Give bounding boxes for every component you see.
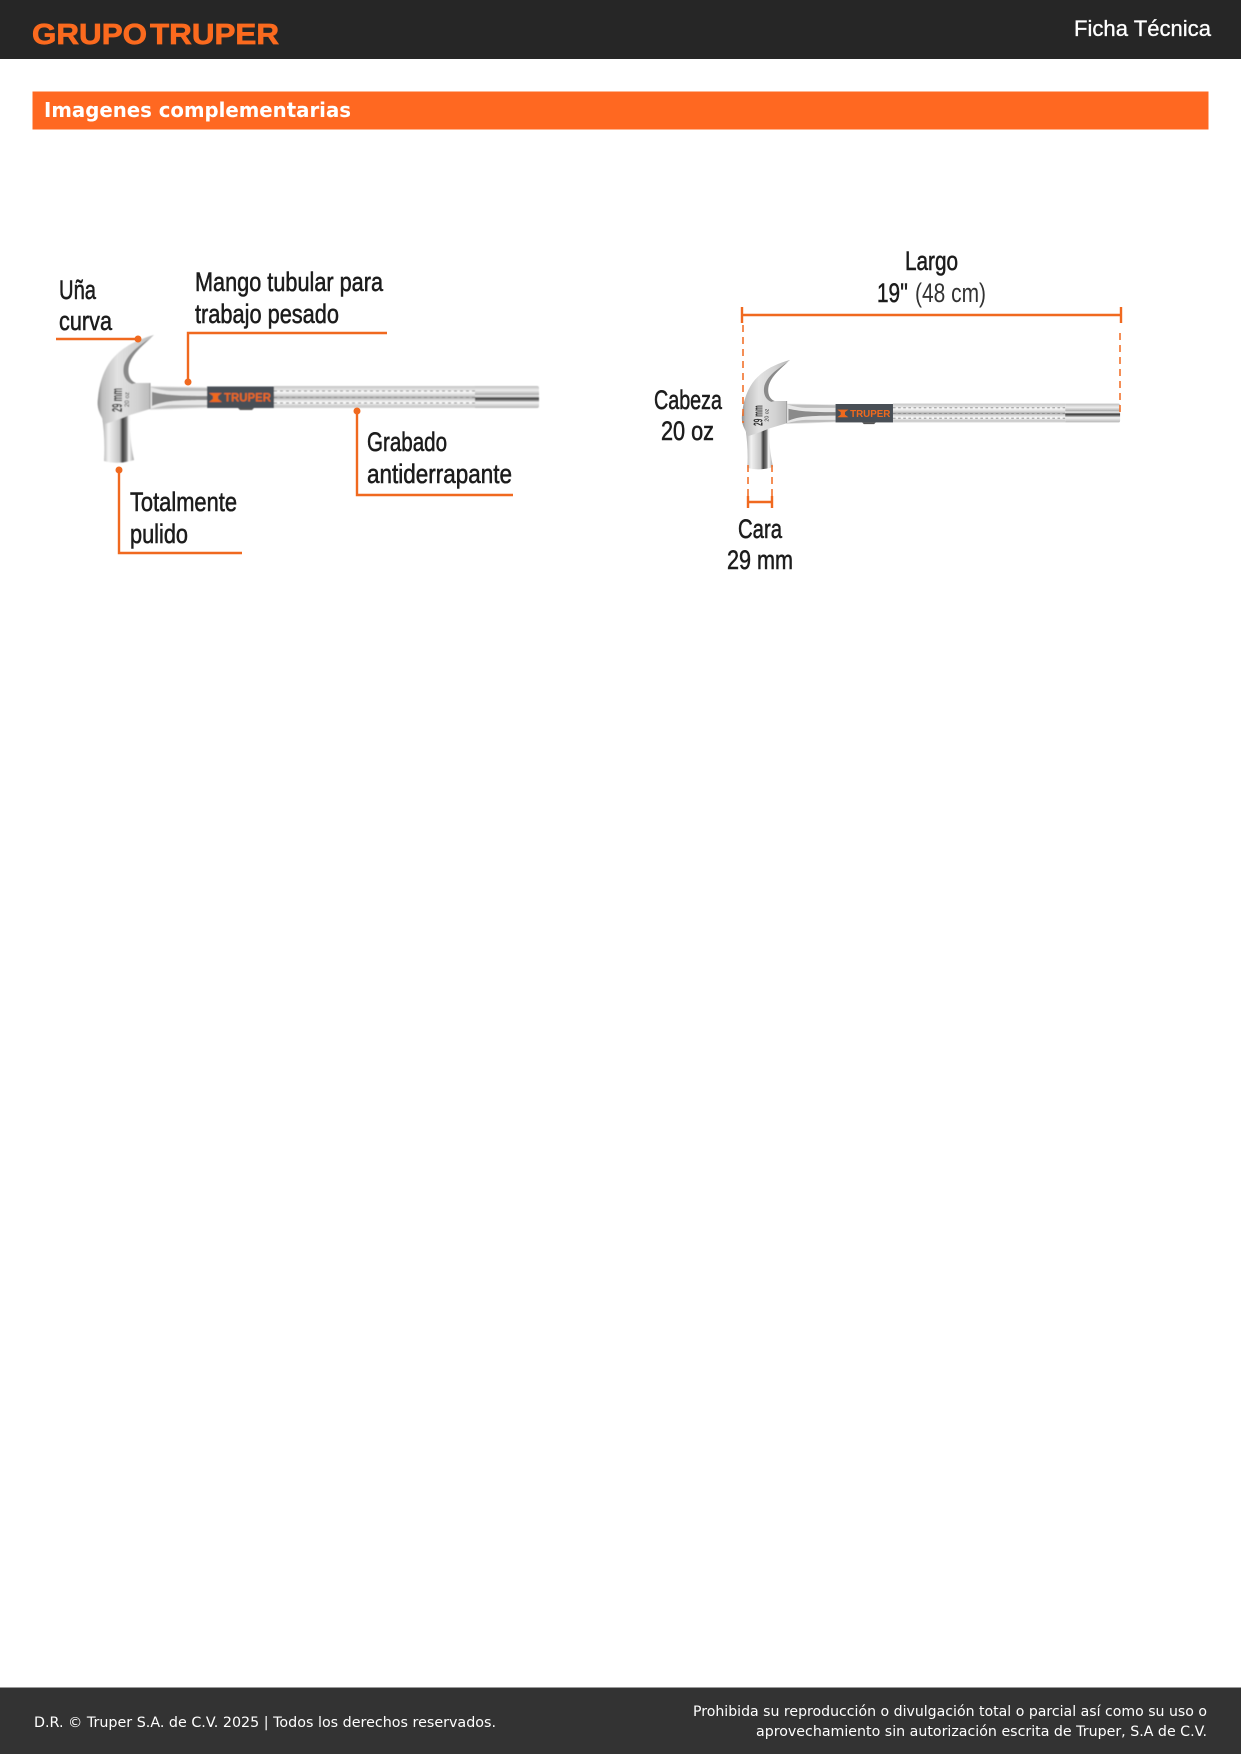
dimension: Largo: [742, 246, 1121, 423]
legal notice: [693, 1704, 1207, 1740]
dimension: Cabeza: [654, 385, 723, 446]
logo: Grupo Truper: [32, 19, 279, 51]
dimension: Cara: Cara: [738, 514, 783, 544]
section heading: Imagenes complementarias: Imagenes complementarias: [44, 98, 351, 122]
dimension: Cabeza: 20 oz: [661, 416, 714, 446]
hammer photo, features view: [98, 335, 539, 463]
hammer photo, features view: 29 mm: [109, 388, 126, 412]
callout: Grabado antiderrapante: Grabado: [367, 427, 447, 457]
dimension: Cara: 29 mm: [727, 545, 793, 575]
hammer photo, dimensions view: 20 oz: [765, 408, 771, 422]
callout: Totalmente pulido: Totalmente: [130, 487, 237, 517]
legal notice: aprovechamiento sin autorización escrita de Truper, S.A de C.V.: [756, 1724, 1207, 1740]
copyright: D.R. © Truper S.A. de C.V. 2025 | Todos los derechos reservados.: [34, 1715, 496, 1731]
hammer photo, dimensions view: [742, 360, 1120, 469]
footer: [0, 1687, 1241, 1754]
dimension: Cara: [727, 465, 793, 575]
callout: Uña curva: Uña: [59, 275, 97, 305]
callout: Uña curva: [56, 275, 142, 342]
dimension: Cabeza: Cabeza: [654, 385, 723, 415]
dimension: Largo: (48 cm): [915, 278, 986, 308]
callout: Grabado antiderrapante: [354, 408, 513, 495]
logo: Grupo Truper: GRUPO: [32, 19, 147, 51]
callout: Totalmente pulido: pulido: [130, 519, 188, 549]
dimension: Largo: 19'': [877, 278, 908, 308]
callout: Uña curva: curva: [59, 306, 113, 336]
document type: Ficha Técnica: Ficha Técnica: [1074, 16, 1212, 41]
callout: Grabado antiderrapante: antiderrapante: [367, 459, 512, 489]
panel: hammer dimensions: [654, 246, 1121, 575]
hammer photo, features view: TRUPER: [224, 390, 271, 404]
legal notice: Prohibida su reproducción o divulgación total o parcial así como su uso o: [693, 1704, 1207, 1720]
callout: Mango tubular: Mango tubular para: [195, 267, 384, 297]
callout: Mango tubular: trabajo pesado: [195, 299, 339, 329]
callout: Mango tubular: [184, 267, 387, 386]
section heading: Imagenes complementarias: [32, 92, 1208, 130]
dimension: Largo: Largo: [905, 246, 958, 276]
hammer photo, dimensions view: TRUPER: [850, 409, 891, 420]
header bar: [0, 0, 1241, 59]
callout: Totalmente pulido: [116, 466, 242, 553]
hammer photo, dimensions view: 29 mm: [751, 405, 766, 426]
panel: hammer features: [56, 267, 539, 553]
hammer photo, features view: 20 oz: [125, 392, 131, 407]
logo: Grupo Truper: TRUPER: [150, 19, 279, 51]
